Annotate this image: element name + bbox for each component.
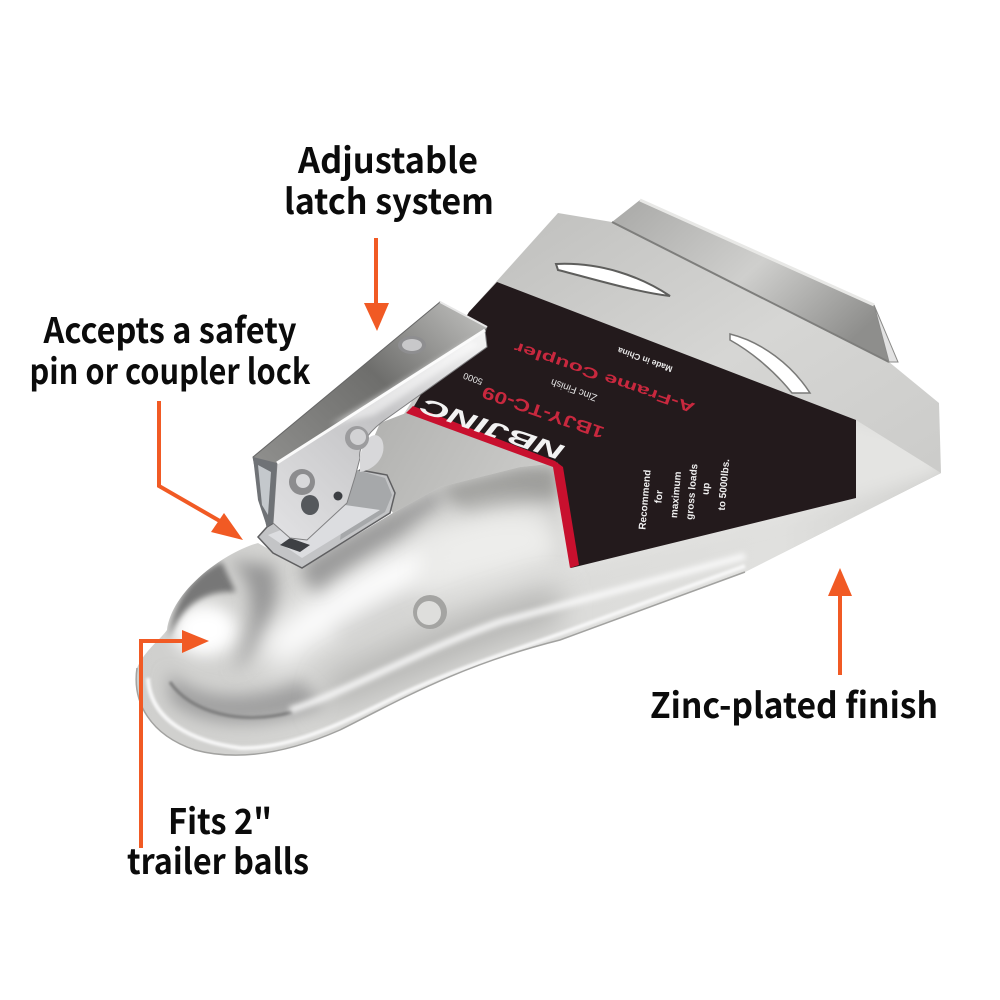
label text: recommendation: up [700,482,713,495]
arrow [141,630,209,848]
latch handle [253,302,487,540]
label text: model number: 1BJY-TC-09 [480,382,607,442]
grey surface behind the latch [360,413,553,513]
coupler body [136,420,941,755]
heading: trailer balls [127,834,309,885]
latch bracket [258,468,395,568]
label text: capacity: 5000 [462,371,484,387]
small hole [334,492,342,500]
callout: trailer balls [127,630,309,885]
coupler product photo [136,200,941,755]
heading: latch system [284,174,494,225]
slot 1 [556,264,670,296]
label text: recommendation: for [653,490,666,504]
side rivet [413,595,447,629]
label wrap [406,282,856,568]
arrow [364,238,389,331]
label text: recommendation: gross loads [685,463,700,520]
heading: Zinc-plated finish [650,678,938,729]
callout: zinc-plated finish [650,568,938,729]
label text: recommendation [637,458,732,530]
heading: Fits 2" [168,794,272,845]
rear flange [612,200,898,362]
heading [284,133,494,225]
slot 2 [730,334,810,393]
label text: Made in China: Made in China [616,345,674,374]
top rivet [398,336,426,354]
label red stripe [406,406,579,568]
latch bolt [289,469,315,495]
heading [127,794,309,885]
arrow [828,568,852,675]
label text: Zinc Finish: Zinc Finish [550,376,599,403]
heading: pin or coupler lock [30,344,310,395]
label text: recommendation: Recommend [637,469,654,530]
pin hole [301,495,319,515]
heading: Accepts a safety [43,303,296,354]
callout: adjustable latch system [284,133,494,331]
callout: safety pin or coupler lock [30,303,310,540]
label text: A-Frame Coupler: A-Frame Coupler [512,338,697,415]
heading [30,303,310,395]
label text: recommendation: maximum [669,471,684,519]
upper pivot pin [345,426,369,450]
label text: brand: NBJINC [416,392,568,465]
label text: recommendation: to 5000lbs. [717,458,732,511]
mounting plate [400,213,941,640]
arrow [159,401,243,540]
heading: Adjustable [297,133,478,184]
